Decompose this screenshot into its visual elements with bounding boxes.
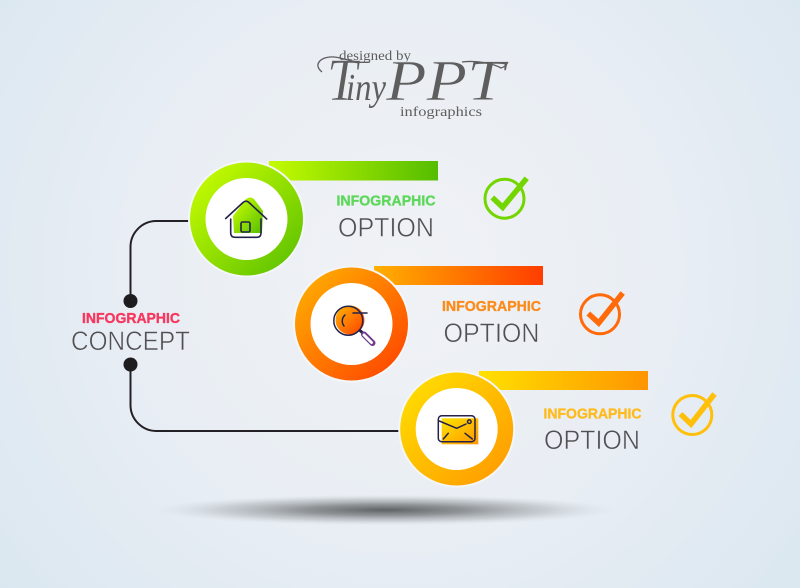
green ribbon bar xyxy=(269,161,438,180)
logo: Tiny PPT xyxy=(318,47,508,120)
logo: Tiny PPT: iny xyxy=(346,67,386,109)
panel: orange option xyxy=(293,266,623,382)
green option label: OPTION xyxy=(338,212,434,242)
central label: infographic concept xyxy=(71,310,190,356)
icon: envelope xyxy=(438,416,478,444)
panel: yellow option xyxy=(398,370,714,488)
central label: infographic concept: INFOGRAPHIC xyxy=(82,310,180,327)
orange option label: OPTION xyxy=(444,318,540,348)
logo: Tiny PPT: designed by xyxy=(339,49,411,64)
logo: Tiny PPT: PPT xyxy=(385,48,508,113)
yellow option heading: INFOGRAPHIC xyxy=(544,406,642,422)
central label: infographic concept: CONCEPT xyxy=(71,326,190,356)
yellow option label: OPTION xyxy=(544,425,640,455)
orange ribbon bar xyxy=(374,266,543,285)
icon: orange check mark xyxy=(580,293,623,334)
icon: magnifying glass xyxy=(334,306,372,343)
logo: Tiny PPT: T xyxy=(327,47,360,113)
ground shadow xyxy=(153,494,617,526)
icon: green check mark xyxy=(485,178,527,218)
icon: yellow check mark xyxy=(673,394,714,434)
orange option heading: INFOGRAPHIC xyxy=(442,298,541,315)
green option heading: INFOGRAPHIC xyxy=(336,192,436,210)
yellow ring xyxy=(398,370,515,488)
icon: house xyxy=(226,198,267,237)
orange ring xyxy=(293,266,410,382)
yellow ribbon bar xyxy=(479,371,648,390)
panel: green option xyxy=(188,160,527,278)
connector lines and dots xyxy=(124,221,402,431)
green ring xyxy=(188,160,305,278)
logo: Tiny PPT: infographics xyxy=(400,105,482,120)
